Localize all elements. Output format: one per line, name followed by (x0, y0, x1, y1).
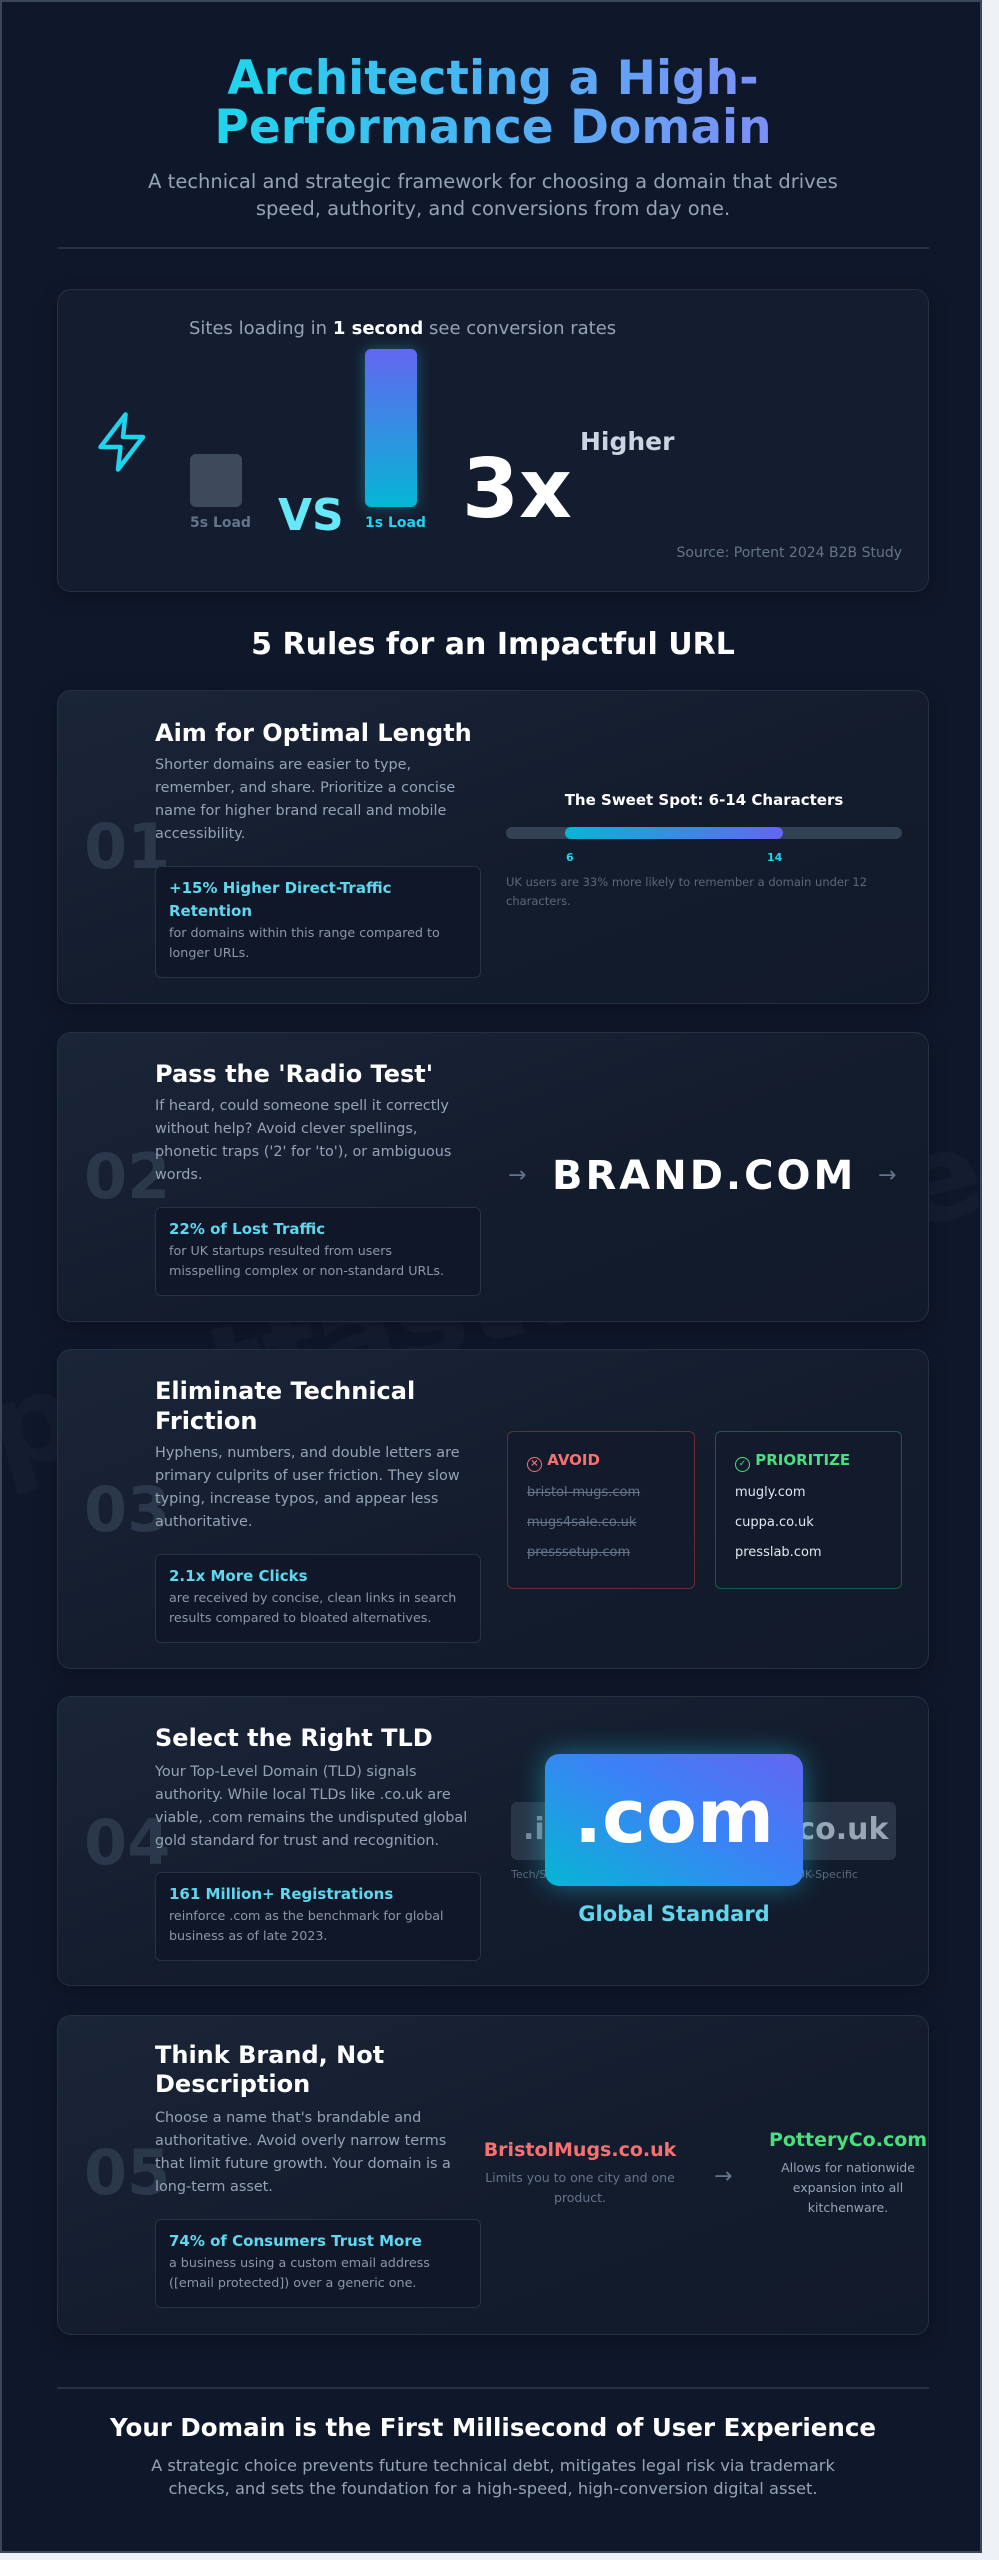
stat box: ([email protected]) over a generic one. (169, 2275, 416, 2290)
sweet spot chart (506, 791, 902, 908)
heading: Select the Right TLD (155, 1724, 433, 1752)
panel: rule 05 (57, 2015, 929, 2335)
number 05: 05 (84, 2136, 170, 2209)
label 1s: 1s Load (365, 515, 426, 531)
text: authoritative. Avoid overly narrow terms (155, 2133, 446, 2149)
good example: PotteryCo.com (769, 2129, 927, 2151)
stat box (155, 866, 481, 978)
stat box: for domains within this range compared to (169, 925, 440, 940)
text (155, 1764, 467, 1849)
stat box (155, 1207, 481, 1296)
brand display: BRAND.COM (552, 1153, 856, 1199)
footer text (151, 2456, 835, 2498)
stat box: misspelling complex or non-standard URLs. (169, 1263, 444, 1278)
text (155, 1098, 451, 1183)
number 02: 02 (84, 1140, 170, 1213)
prioritize list: PRIORITIZE (755, 1451, 850, 1469)
text (155, 2110, 451, 2195)
number 01: 01 (84, 810, 170, 883)
stat box: business as of late 2023. (169, 1928, 327, 1943)
text: Shorter domains are easier to type, (155, 757, 411, 773)
avoid list (507, 1431, 695, 1589)
section heading: 5 Rules for an Impactful URL (251, 627, 735, 662)
text: viable, .com remains the undisputed global (155, 1810, 467, 1826)
stat box: +15% Higher Direct-Traffic Retention (169, 879, 392, 920)
subtitle (148, 170, 838, 220)
stat box: are received by concise, clean links in search (169, 1590, 456, 1605)
tld comparison: Tech/Startup (511, 1868, 580, 1881)
prioritize list: mugly.com (735, 1485, 806, 1500)
text: primary culprits of user friction. They slow (155, 1468, 460, 1484)
higher: Higher (580, 427, 674, 456)
bad example (484, 2139, 676, 2205)
sweet spot chart: 6 (566, 851, 574, 864)
good example (769, 2129, 927, 2215)
stat box: results compared to bloated alternatives. (169, 1610, 431, 1625)
text: long-term asset. (155, 2179, 273, 2195)
prioritize list: ✓ (739, 1459, 746, 1469)
heading: Aim for Optimal Length (155, 719, 472, 747)
tld comparison (511, 1737, 896, 1926)
source: Source: Portent 2024 B2B Study (676, 545, 902, 561)
text: Your Top-Level Domain (TLD) signals (155, 1764, 417, 1780)
text: remember, and share. Prioritize a concise (155, 780, 455, 796)
text: words. (155, 1167, 202, 1183)
prioritize list: presslab.com (735, 1545, 822, 1560)
.com highlight: .com (574, 1774, 774, 1860)
text (155, 757, 455, 842)
icon: lightning bolt (98, 412, 146, 472)
stat box: a business using a custom email address (169, 2255, 430, 2270)
panel: rule 02 (57, 1032, 929, 1322)
avoid list: presssetup.com (527, 1545, 630, 1560)
avoid list: bristol-mugs.com (527, 1485, 640, 1500)
stat box (155, 1872, 481, 1961)
stat box: reinforce .com as the benchmark for global (169, 1908, 444, 1923)
text: that limit future growth. Your domain is a (155, 2156, 451, 2172)
text: without help? Avoid clever spellings, (155, 1121, 417, 1137)
brand display: → (878, 1163, 896, 1188)
panel: rule 04 (57, 1696, 929, 1986)
number 04: 04 (84, 1806, 170, 1879)
heading: Think Brand, Not Description (155, 2041, 384, 2098)
global standard: Global Standard (578, 1902, 770, 1926)
bad example: Limits you to one city and one product. (485, 2170, 675, 2205)
bar: 1s load (365, 349, 417, 507)
3x: 3x (462, 442, 572, 537)
text: Choose a name that's brandable and (155, 2110, 421, 2126)
text: phonetic traps ('2' for 'to'), or ambiguous (155, 1144, 451, 1160)
text: name for higher brand recall and mobile (155, 803, 446, 819)
text (155, 1445, 460, 1530)
title: Architecting a High- (227, 51, 759, 106)
bar: 5s load (190, 454, 242, 507)
footer text: A strategic choice prevents future technical debt, mitigates legal risk via trademark (151, 2456, 835, 2475)
text: gold standard for trust and recognition. (155, 1833, 439, 1849)
vs: VS (278, 490, 344, 541)
stat box: 161 Million+ Registrations (169, 1885, 393, 1903)
text: authoritative. (155, 1514, 252, 1530)
title: Performance Domain (214, 100, 772, 155)
sweet spot chart: The Sweet Spot: 6-14 Characters (565, 791, 843, 809)
footer heading: Your Domain is the First Millisecond of User Experience (110, 2413, 876, 2442)
stat box: for UK startups resulted from users (169, 1243, 392, 1258)
.com highlight (545, 1754, 803, 1886)
text: typing, increase typos, and appear less (155, 1491, 438, 1507)
tld comparison: .io (523, 1812, 565, 1847)
bad example: BristolMugs.co.uk (484, 2139, 676, 2161)
title (2, 54, 984, 152)
stat box (155, 1554, 481, 1643)
prioritize list: cuppa.co.uk (735, 1515, 814, 1530)
tld comparison: .co.uk (786, 1812, 888, 1847)
text: Hyphens, numbers, and double letters are (155, 1445, 460, 1461)
number 03: 03 (84, 1473, 170, 1546)
prioritize list (715, 1431, 902, 1589)
panel: rule 01 (57, 690, 929, 1004)
heading: Pass the 'Radio Test' (155, 1060, 433, 1088)
heading: Eliminate Technical Friction (155, 1377, 415, 1435)
panel: rule 01: UK users are 33% more likely to remember a domain under 12 characters. (506, 875, 867, 908)
stat box: longer URLs. (169, 945, 249, 960)
avoid list: mugs4sale.co.uk (527, 1515, 636, 1530)
good example: Allows for nationwide expansion into all kitchenware. (781, 2160, 915, 2215)
stat box: 22% of Lost Traffic (169, 1220, 325, 1238)
avoid list: AVOID (547, 1451, 600, 1469)
subtitle: A technical and strategic framework for choosing a domain that drives (148, 170, 838, 193)
text: accessibility. (155, 826, 245, 842)
tld comparison: UK-Specific (797, 1868, 858, 1881)
brand display: → (508, 1163, 526, 1188)
subtitle: speed, authority, and conversions from day one. (256, 197, 730, 220)
panel: speed stat (57, 289, 929, 592)
sweet spot chart: 14 (767, 851, 782, 864)
text: authority. While local TLDs like .co.uk are (155, 1787, 451, 1803)
panel: rule 03 (57, 1349, 929, 1669)
stat box (155, 2219, 481, 2308)
stat box: 2.1x More Clicks (169, 1567, 308, 1585)
footer text: checks, and sets the foundation for a high-speed, high-conversion digital asset. (168, 2479, 818, 2498)
stat heading: Sites loading in 1 second see conversion rates (189, 318, 616, 339)
label 5s: 5s Load (190, 515, 251, 531)
avoid list: × (530, 1458, 539, 1469)
text: If heard, could someone spell it correctly (155, 1098, 449, 1114)
stat box: 74% of Consumers Trust More (169, 2232, 422, 2250)
arrow: → (714, 2164, 732, 2189)
